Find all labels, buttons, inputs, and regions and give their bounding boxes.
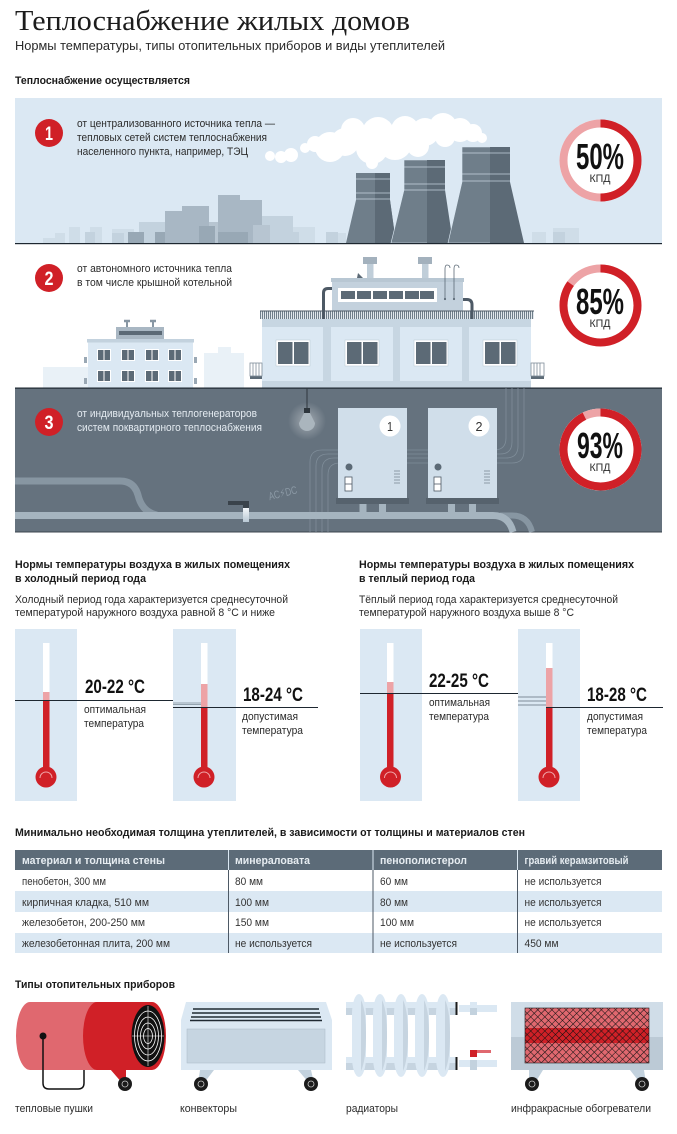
description 1: тепловых сетей систем теплоснабжения bbox=[77, 132, 267, 144]
warm period heading bbox=[359, 559, 635, 585]
boiler 1 bbox=[336, 408, 409, 504]
description 3: от индивидуальных теплогенераторов bbox=[77, 408, 257, 420]
table rows: железобетон, 200-250 мм bbox=[22, 917, 145, 929]
table rows: железобетонная плита, 200 мм bbox=[22, 938, 170, 950]
description 1: от централизованного источника тепла — bbox=[77, 118, 275, 130]
gauge 93% bbox=[560, 408, 642, 490]
label: radiators: радиаторы bbox=[346, 1103, 398, 1115]
warm period description: Тёплый период года характеризуется среднесуточной bbox=[359, 594, 618, 606]
thermometer: cold optimal: температура bbox=[84, 718, 145, 730]
small apartment building bbox=[84, 321, 197, 388]
label: convectors: конвекторы bbox=[180, 1103, 237, 1115]
thermometer: warm permissible: допустимая bbox=[587, 711, 643, 723]
icon: radiator bbox=[346, 994, 497, 1077]
table rows: пенобетон, 300 мм bbox=[22, 876, 106, 888]
icon: infrared heater bbox=[511, 1002, 663, 1091]
table rows: 60 мм bbox=[380, 876, 408, 888]
badge 1: 1 bbox=[45, 124, 53, 145]
panel: central heat source bbox=[15, 98, 662, 244]
table rows: 100 мм bbox=[235, 897, 269, 909]
warm period description bbox=[359, 594, 618, 619]
thermometer: warm permissible: температура bbox=[587, 725, 648, 737]
table rows: не используется bbox=[524, 876, 602, 888]
thermometer: warm optimal: оптимальная bbox=[429, 697, 490, 709]
icon: heat gun bbox=[16, 1002, 166, 1091]
table rows: 450 мм bbox=[524, 938, 558, 950]
panel: autonomous heat source bbox=[35, 257, 642, 388]
floor pipes bbox=[15, 481, 532, 532]
cold period heading: в холодный период года bbox=[15, 573, 147, 585]
cooling towers bbox=[346, 147, 524, 243]
table rows: не используется bbox=[524, 897, 602, 909]
gauge 93%: 93% bbox=[577, 425, 623, 466]
table header: гравий керамзитовый bbox=[524, 855, 628, 867]
boiler 1: 1 bbox=[387, 419, 393, 434]
description 3 bbox=[77, 408, 262, 434]
thermometer: cold optimal bbox=[15, 629, 201, 801]
cold period heading bbox=[15, 559, 291, 585]
light bulb bbox=[288, 388, 326, 440]
subtitle: Нормы температуры, типы отопительных приборов и виды утеплителей bbox=[15, 38, 445, 53]
badge 2 bbox=[35, 264, 63, 292]
table header: пенополистерол bbox=[380, 855, 467, 867]
gauge 85%: 85% bbox=[576, 281, 624, 322]
smoke cloud bbox=[265, 113, 487, 169]
table rows: не используется bbox=[235, 938, 312, 950]
thermometer: cold permissible: 18-24 °С bbox=[243, 685, 303, 706]
table rows: 80 мм bbox=[235, 876, 263, 888]
boiler 2 bbox=[426, 408, 499, 504]
thermometer: cold optimal: 20-22 °С bbox=[85, 677, 145, 698]
description 1: населенного пункта, например, ТЭЦ bbox=[77, 146, 248, 158]
table header bbox=[22, 855, 628, 867]
badge 3 bbox=[35, 408, 63, 436]
description 2: от автономного источника тепла bbox=[77, 263, 233, 275]
insulation table bbox=[15, 850, 662, 953]
description 2 bbox=[77, 263, 233, 289]
cold period heading: Нормы температуры воздуха в жилых помещениях bbox=[15, 559, 291, 571]
gauge 50%: 50% bbox=[576, 136, 624, 177]
thermometer: warm optimal: температура bbox=[429, 711, 490, 723]
thermometer: cold optimal: оптимальная bbox=[84, 704, 146, 716]
description 3: систем поквартирного теплоснабжения bbox=[77, 422, 262, 434]
icon: convector bbox=[181, 1002, 332, 1091]
table rows: 150 мм bbox=[235, 917, 269, 929]
valve bbox=[228, 501, 249, 522]
table rows bbox=[22, 876, 602, 950]
thermometer: warm optimal bbox=[360, 629, 546, 801]
table heading: Минимально необходимая толщина утеплителей, в зависимости от толщины и материалов стен bbox=[15, 827, 525, 839]
label: infrared heaters: инфракрасные обогреватели bbox=[511, 1103, 651, 1115]
large building with roof boiler bbox=[250, 257, 544, 388]
warm period heading: Нормы температуры воздуха в жилых помещениях bbox=[359, 559, 635, 571]
panel: individual heat generators bbox=[15, 388, 662, 532]
badge 1 bbox=[35, 119, 63, 147]
thermometer: cold permissible bbox=[173, 629, 318, 801]
badge 2: 2 bbox=[44, 269, 54, 290]
cold period description bbox=[15, 594, 288, 619]
table header: материал и толщина стены bbox=[22, 855, 165, 867]
section heading: heat supply: Теплоснабжение осуществляется bbox=[15, 75, 190, 87]
city skyline bbox=[43, 195, 579, 243]
gauge 50% bbox=[560, 120, 642, 202]
gauge 50%: КПД bbox=[590, 173, 611, 185]
background buildings bbox=[43, 347, 244, 388]
table rows: кирпичная кладка, 510 мм bbox=[22, 897, 149, 909]
label: heat guns: тепловые пушки bbox=[15, 1103, 93, 1115]
gauge 85%: КПД bbox=[590, 318, 611, 330]
thermometer: warm permissible: 18-28 °С bbox=[587, 685, 647, 706]
gauge 93%: КПД bbox=[590, 462, 611, 474]
cold period description: Холодный период года характеризуется среднесуточной bbox=[15, 594, 288, 606]
description 1 bbox=[77, 118, 275, 158]
heaters heading: Типы отопительных приборов bbox=[15, 979, 175, 991]
warm period heading: в теплый период года bbox=[359, 573, 476, 585]
table rows: 80 мм bbox=[380, 897, 408, 909]
table rows: не используется bbox=[380, 938, 457, 950]
badge 3: 3 bbox=[44, 413, 54, 434]
gauge 85% bbox=[560, 264, 642, 346]
wall graffiti: AC⚡DC bbox=[267, 484, 299, 503]
table header: минераловата bbox=[235, 855, 311, 867]
table rows: 100 мм bbox=[380, 917, 414, 929]
boiler 2: 2 bbox=[476, 419, 482, 434]
thermometer: warm optimal: 22-25 °С bbox=[429, 671, 489, 692]
description 2: в том числе крышной котельной bbox=[77, 277, 232, 289]
warm period description: температурой наружного воздуха выше 8 °С bbox=[359, 607, 574, 619]
thermometer: cold permissible: допустимая bbox=[242, 711, 298, 723]
table rows: не используется bbox=[524, 917, 602, 929]
title: Теплоснабжение жилых домов bbox=[15, 5, 410, 37]
thermometer: warm permissible bbox=[518, 629, 663, 801]
cold period description: температурой наружного воздуха равной 8 °С и ниже bbox=[15, 607, 275, 619]
thermometer: cold permissible: температура bbox=[242, 725, 304, 737]
thin pipe bundle bbox=[310, 388, 524, 532]
